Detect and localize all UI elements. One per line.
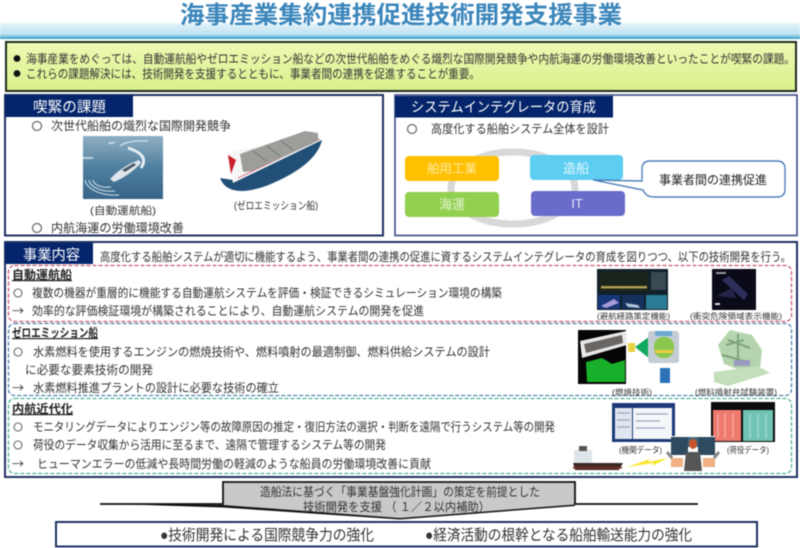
- panel heading: system integrator: システムインテグレータの育成: [411, 99, 596, 115]
- label: cargo data: (荷役データ): [727, 445, 769, 455]
- panel heading: urgent issues: 喫緊の課題: [33, 99, 106, 116]
- image: zero emission ship: [220, 131, 322, 191]
- diagram ring: [451, 152, 575, 224]
- item: hydrogen engine: [14, 344, 490, 377]
- label: engine data: (機関データ): [619, 445, 662, 455]
- image: cargo data screen: [711, 402, 775, 442]
- summary box: [6, 42, 796, 91]
- outcome box: ●技術開発による国際競争力の強化: [160, 526, 374, 544]
- arrow: support scheme: [100, 482, 698, 520]
- section: zero emission ship: [8, 324, 792, 397]
- box: IT: IT: [571, 196, 583, 211]
- panel heading: project content: [5, 243, 93, 264]
- box: shipping: 海運: [439, 197, 465, 212]
- icon: remote operator: [667, 436, 719, 472]
- item: hydrogen engine: に必要な要素技術の開発: [25, 362, 153, 377]
- section heading: zero emission ship: ゼロエミッション船: [12, 325, 98, 340]
- item: engine monitoring: モニタリングデータによりエンジン等の故障原因の推定・復旧方法の選択・判断を遠隔で行うシステム等の開発: [33, 419, 555, 434]
- title band: [0, 23, 800, 39]
- arrow: support scheme: 造船法に基づく「事業基盤強化計画」の策定を前提とした: [260, 484, 540, 499]
- item: hydrogen plant: 水素燃料推進プラントの設計に必要な技術の確立: [33, 380, 279, 395]
- bullet: international competition: 次世代船舶の熾烈な国際開発競争: [51, 118, 231, 133]
- panel heading: system integrator: [395, 96, 613, 118]
- callout: collaboration: 事業者間の連携促進: [659, 172, 767, 187]
- panel heading: project content: 事業内容: [23, 247, 80, 264]
- panel: project content: [5, 242, 797, 477]
- panel: system integrator: [395, 95, 797, 236]
- item: cargo data: 荷役のデータ収集から活用に至るまで、遠隔で管理するシステム等の開発: [33, 437, 386, 452]
- title: 海事産業集約連携促進技術開発支援事業: [180, 2, 622, 29]
- label: autonomous ship: (自動運航船): [90, 204, 156, 217]
- item: hydrogen engine: 水素燃料を使用するエンジンの燃焼技術や、燃料噴射の最適制御、燃料供給システムの設計: [33, 344, 490, 359]
- label: route planning: (避航経路策定機能): [597, 311, 670, 321]
- icon: ship: [573, 446, 623, 470]
- bullet: system design: 高度化する船舶システム全体を設計: [431, 121, 609, 136]
- item: result: →: [12, 302, 24, 319]
- arrow: support scheme: 技術開発を支援 （ １／２以内補助）: [303, 499, 490, 514]
- box: marine equipment: [405, 156, 499, 181]
- section heading: autonomous ship: 自動運航船: [12, 267, 72, 282]
- section heading: coastal modernization: 内航近代化: [12, 401, 73, 416]
- panel: urgent issues: [5, 95, 383, 236]
- image: collision risk screen: [712, 269, 756, 310]
- image: combustion technology: [578, 330, 679, 384]
- image: route planning screen: [597, 269, 668, 310]
- box: IT: [531, 191, 625, 216]
- callout: collaboration: [593, 161, 785, 197]
- section: coastal modernization: [8, 398, 792, 474]
- image: engine data screen: [612, 403, 675, 442]
- box: shipping: [405, 192, 499, 217]
- panel heading: urgent issues: [5, 95, 133, 117]
- image: autonomous ship: [83, 136, 163, 199]
- label: combustion technology: (燃焼技術): [612, 387, 652, 397]
- box: marine equipment: 舶用工業: [427, 161, 477, 176]
- bullet: coastal shipping labor: 内航海運の労働環境改善: [51, 220, 184, 235]
- label: zero emission ship: (ゼロエミッション船): [234, 199, 318, 212]
- item: result: 効率的な評価検証環境が構築されることにより、自動運航システムの開発を促進: [32, 303, 424, 318]
- section: autonomous ship: [8, 266, 792, 322]
- item: hydrogen plant: →: [12, 379, 24, 396]
- icon: data link lightning: [627, 458, 668, 467]
- image: fuel injector test rig: [714, 330, 770, 386]
- box: shipbuilding: [530, 155, 623, 180]
- outcome box: [56, 522, 757, 546]
- label: fuel injector test rig: (燃料噴射弁試験装置): [695, 387, 777, 397]
- box: shipbuilding: 造船: [563, 161, 589, 176]
- item: simulation environment: 複数の機器が重層的に機能する自動運航システムを評価・検証できるシミュレーション環境の構築: [32, 285, 502, 300]
- summary box: これらの課題解決には、技術開発を支援するとともに、事業者間の連携を促進することが重要。: [26, 66, 480, 81]
- item: human error: →: [12, 455, 24, 472]
- outcome box: ●経済活動の根幹となる船舶輸送能力の強化: [425, 527, 692, 544]
- label: collision risk: (衝突危険領域表示機能): [690, 311, 782, 321]
- item: human error: ヒューマンエラーの低減や長時間労働の軽減のような船員の労働環境改善に貢献: [37, 456, 431, 471]
